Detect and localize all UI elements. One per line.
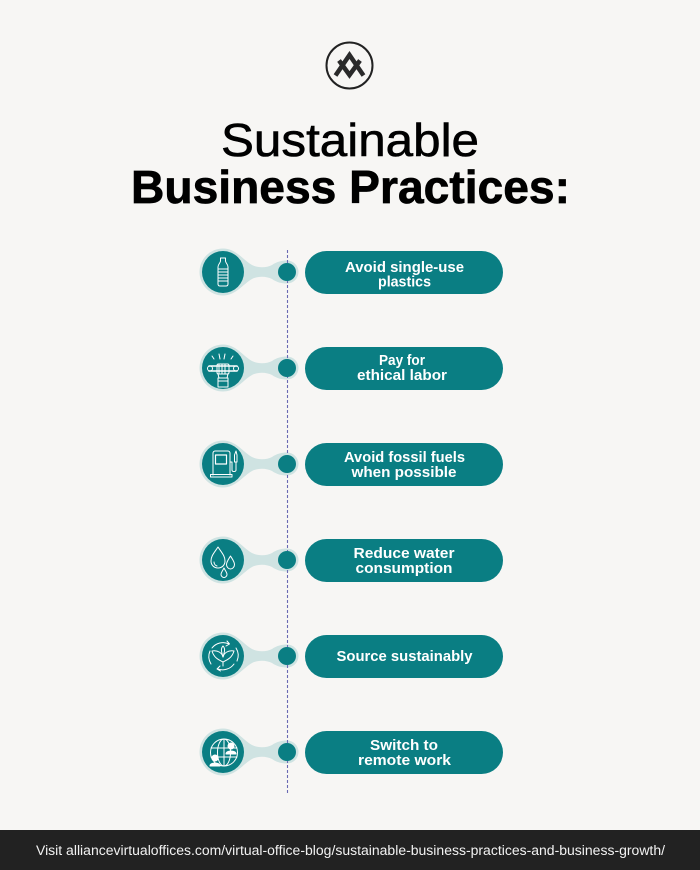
logo	[326, 42, 372, 88]
step 3: fossil fuels	[200, 440, 503, 488]
label pill	[305, 251, 503, 294]
step 5: source	[200, 632, 503, 680]
title	[131, 114, 570, 213]
label pill	[305, 347, 503, 390]
step 3: fossil fuels: when possible	[350, 465, 456, 481]
label pill	[305, 731, 503, 774]
title: Business Practices:	[131, 161, 570, 213]
timeline dashed line	[286, 250, 288, 794]
icon: water drops	[211, 547, 234, 578]
icon: bottle	[218, 258, 228, 286]
step 2: labor: ethical labor	[357, 368, 447, 384]
label pill	[305, 635, 503, 678]
footer	[0, 830, 700, 870]
step 4: water	[200, 536, 503, 584]
label text: Avoid fossil fuels	[344, 450, 465, 466]
label text: Reduce water	[354, 546, 455, 562]
label pill	[305, 539, 503, 582]
step 1: plastics	[200, 248, 503, 296]
step 4: water: consumption	[356, 561, 452, 577]
step 6: remote work: remote work	[358, 753, 452, 769]
footer: Visit alliancevirtualoffices.com/virtual-office-blog/sustainable-business-practices-and-business-growth/	[36, 843, 665, 858]
step 6: remote work	[200, 728, 503, 776]
icon: fist with wrench	[208, 354, 238, 387]
step 1: plastics: plastics	[378, 274, 431, 290]
step 2: labor	[200, 344, 503, 392]
label text: Switch to	[370, 738, 438, 754]
title: Sustainable	[221, 114, 479, 166]
timeline dots	[278, 263, 296, 761]
label text: Pay for	[379, 353, 425, 369]
label pill	[305, 443, 503, 486]
label text: Avoid single-use	[345, 260, 464, 276]
label text: Source sustainably	[336, 649, 472, 665]
icon: fuel pump	[210, 451, 237, 477]
icon: leaves in cycle arrows	[209, 641, 238, 671]
icon: globe with people	[210, 739, 238, 766]
